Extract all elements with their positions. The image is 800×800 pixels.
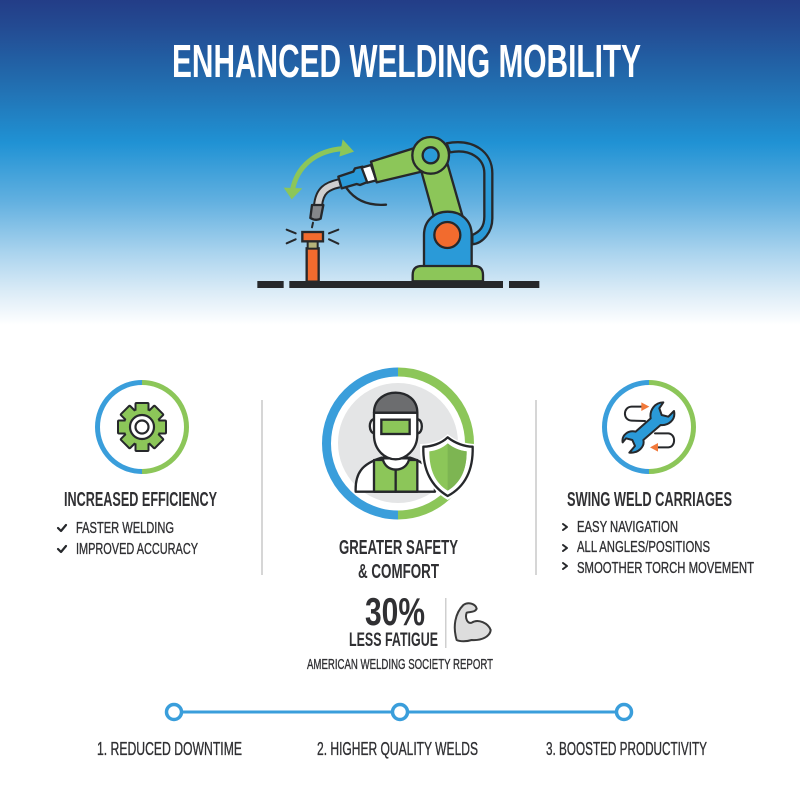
panel: greater safety and comfort [307, 372, 493, 673]
statistic: 30% less fatigue: 30% [365, 591, 425, 634]
list: efficiency benefits [58, 520, 198, 558]
panel: increased efficiency [58, 382, 217, 558]
list: efficiency benefits: FASTER WELDING [76, 520, 174, 537]
heading: & COMFORT [358, 561, 439, 583]
list: carriage benefits: EASY NAVIGATION [577, 519, 678, 536]
divider [445, 598, 446, 648]
illustration: welding robot arm [257, 137, 539, 288]
torch [310, 183, 339, 220]
elbow joint [412, 137, 449, 174]
list: carriage benefits [563, 519, 754, 577]
source note: AMERICAN WELDING SOCIETY REPORT [307, 656, 493, 673]
heading: GREATER SAFETY [339, 537, 458, 559]
icon: welder with shield in ring [326, 372, 477, 515]
cable [347, 188, 386, 205]
label: boosted productivity: 3. BOOSTED PRODUCTIVITY [546, 739, 707, 759]
header background [0, 0, 800, 325]
icon: flexed arm [455, 603, 491, 641]
label: higher quality welds: 2. HIGHER QUALITY WELDS [317, 739, 478, 759]
green base [413, 266, 483, 281]
arrow: swing motion [284, 139, 354, 199]
divider left [261, 400, 263, 575]
icon: gear in ring [98, 382, 187, 472]
weld workpiece with sparks [287, 223, 338, 282]
orange joint [434, 222, 460, 248]
divider right [535, 400, 537, 575]
label: reduced downtime: 1. REDUCED DOWNTIME [97, 739, 242, 759]
heading: INCREASED EFFICIENCY [64, 489, 217, 511]
timeline [97, 704, 707, 759]
statistic: 30% less fatigue: LESS FATIGUE [349, 630, 438, 651]
hose [447, 142, 492, 244]
icon: wrench in ring [604, 382, 694, 472]
panel: swing weld carriages [563, 382, 754, 577]
statistic: 30% less fatigue [349, 591, 438, 651]
blue wrist [338, 167, 368, 188]
list: efficiency benefits: IMPROVED ACCURACY [76, 541, 198, 558]
blue tower [424, 212, 472, 267]
list: carriage benefits: ALL ANGLES/POSITIONS [577, 539, 710, 556]
ground line [257, 281, 539, 288]
white band [362, 165, 376, 183]
upper arm [421, 163, 463, 218]
forearm [371, 147, 422, 182]
heading [339, 537, 458, 583]
